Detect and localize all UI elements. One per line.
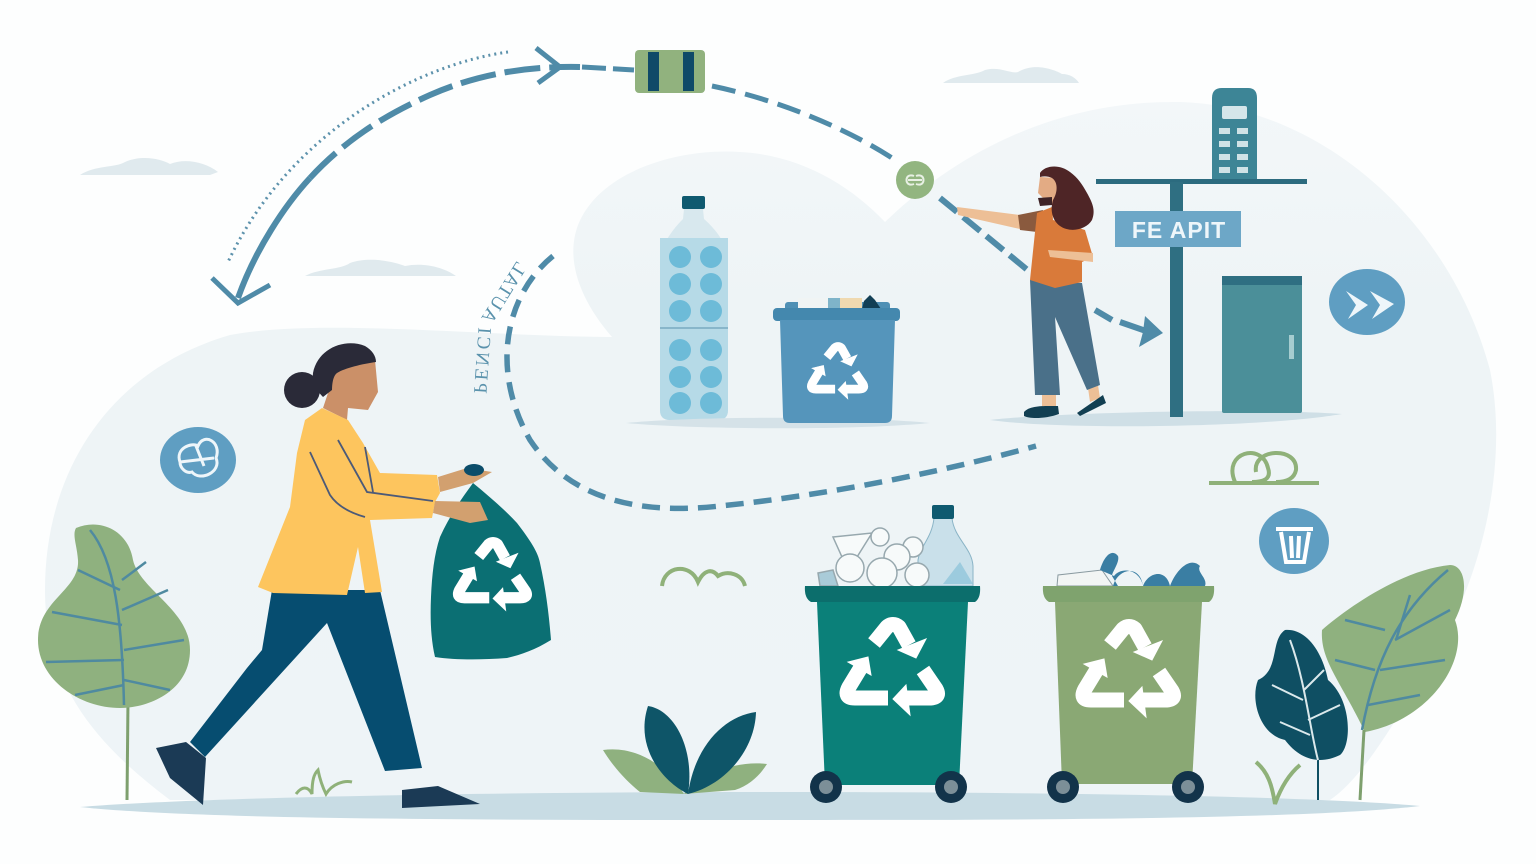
icon: recycling badge (160, 427, 236, 493)
sprout (662, 569, 745, 586)
icon: trash (1259, 508, 1329, 574)
plastic bottle in bin (918, 518, 973, 586)
ticket icon (635, 50, 705, 93)
curved label: PENCI (469, 327, 495, 394)
green recycling bin (805, 505, 980, 803)
right foliage (1255, 565, 1464, 804)
bag (431, 483, 551, 659)
curved label: AUTAL (477, 258, 531, 326)
shirt (258, 408, 440, 595)
shelf shadow (626, 418, 930, 428)
olive recycling bin (1043, 553, 1214, 803)
node icon (896, 161, 934, 199)
blue bin (773, 295, 900, 423)
head (323, 360, 378, 420)
kiosk (1212, 88, 1257, 179)
tree left (38, 525, 190, 800)
sign post (1096, 179, 1307, 417)
sign (1115, 211, 1241, 247)
icon: leaf loop (1209, 453, 1319, 483)
clouds (80, 67, 1079, 276)
centre plant (603, 706, 767, 794)
bottle (660, 196, 728, 420)
teal locker (1222, 276, 1302, 413)
curved label (469, 258, 531, 394)
person pointing (957, 166, 1106, 418)
sign: FE APIT (1132, 217, 1226, 243)
woman with bag (156, 343, 551, 808)
grass left (296, 770, 352, 794)
arrowhead (1139, 316, 1163, 347)
shoes (156, 742, 480, 808)
dashed cycle arrows (212, 48, 1146, 508)
plastic waste (818, 528, 929, 588)
trousers (190, 590, 422, 771)
hands (438, 468, 492, 492)
icon: forward arrows (1329, 269, 1405, 335)
ground (80, 792, 1420, 820)
ground shadow (990, 411, 1342, 426)
